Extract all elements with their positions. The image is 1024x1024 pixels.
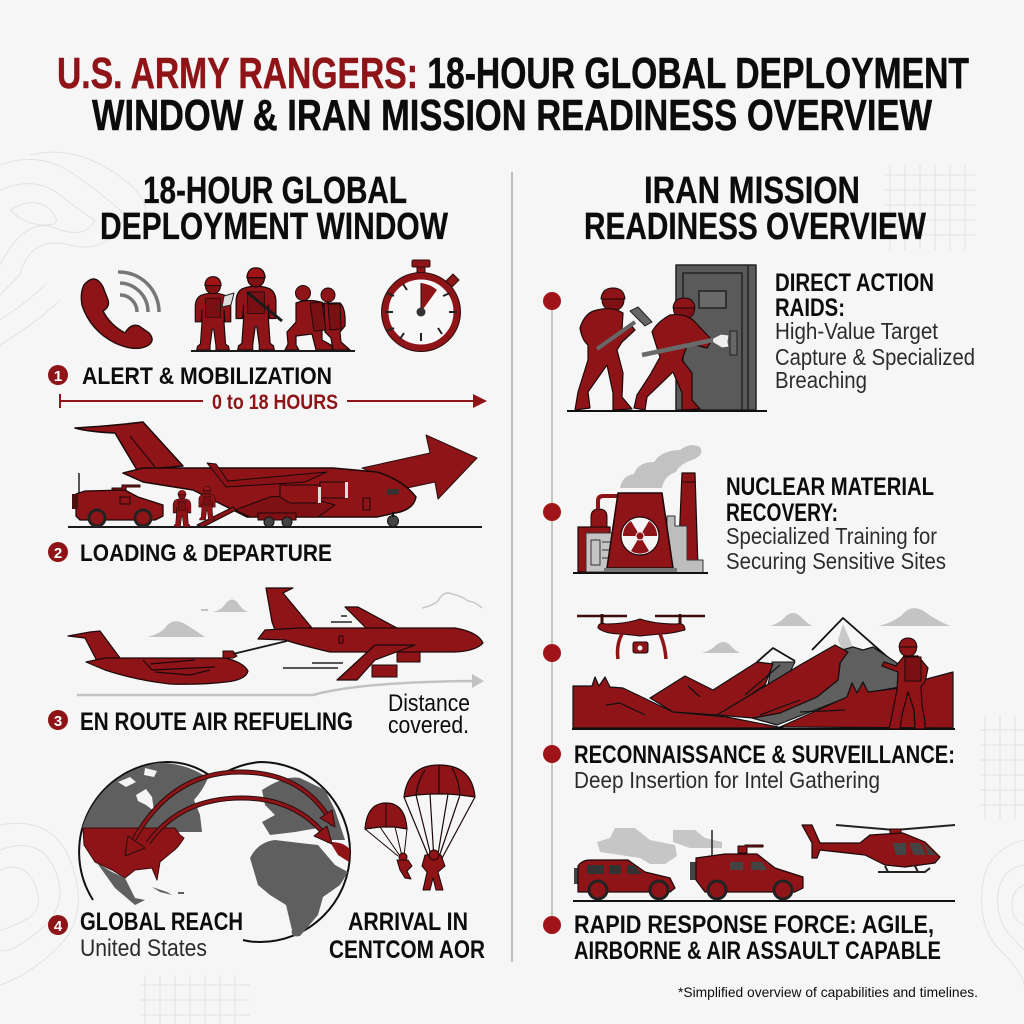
text: distance covered: [388, 690, 470, 739]
heading: iran mission: IRAN MISSION: [644, 170, 860, 212]
text: arrival in centcom aor: ARRIVAL IN: [348, 908, 468, 936]
illustration: transport aircraft loading: [68, 422, 482, 527]
text: reconnaissance and surveillance: Deep Insertion for Intel Gathering: [574, 767, 880, 793]
text: nuclear material recovery: RECOVERY:: [726, 499, 838, 527]
text: direct action raids: RAIDS:: [775, 294, 845, 322]
icon: armoured truck: [690, 830, 803, 899]
timeline arrow: 0 to 18 hours: 0 to 18 HOURS: [212, 391, 338, 414]
timeline arrow: 0 to 18 hours: [60, 391, 487, 414]
text: reconnaissance and surveillance: [574, 741, 955, 793]
icon: stopwatch: [382, 260, 460, 352]
step 2: loading and departure: LOADING & DEPARTURE: [80, 540, 332, 567]
text: nuclear material recovery: Securing Sensitive Sites: [726, 548, 946, 574]
illustration: nuclear site: [573, 445, 708, 573]
step 1: alert and mobilization: ALERT & MOBILIZATION: [82, 363, 332, 390]
text: rapid response force: RAPID RESPONSE FORCE: AGILE,: [574, 911, 934, 939]
text: distance covered: Distance: [388, 690, 470, 717]
title: [57, 49, 969, 140]
text: nuclear material recovery: [726, 473, 946, 574]
text: rapid response force: [574, 911, 941, 965]
text: arrival in centcom aor: [329, 908, 485, 964]
icon: soldier observing: [882, 638, 928, 729]
text: direct action raids: Breaching: [775, 367, 867, 393]
heading: deployment window: 18-HOUR GLOBAL: [143, 170, 407, 212]
heading: iran mission: [584, 170, 926, 248]
divider: [511, 172, 513, 962]
icon: helicopter: [802, 825, 955, 872]
text: direct action raids: [775, 269, 975, 393]
text: rapid response force: AIRBORNE & AIR ASSAULT CAPABLE: [574, 937, 941, 965]
illustration: refuelling receiver aircraft: [68, 631, 287, 684]
step 4: global reach: GLOBAL REACH: [80, 908, 243, 936]
illustration: clouds: [147, 593, 482, 637]
icon: soldiers: [191, 268, 355, 351]
icon: phone: [81, 272, 159, 348]
icon: soldiers boarding: [173, 486, 215, 527]
illustration: mountains: [572, 618, 955, 729]
text: direct action raids: Capture & Specialized: [775, 344, 975, 370]
step 3: en route refuelling: EN ROUTE AIR REFUELING: [80, 708, 353, 736]
text: nuclear material recovery: Specialized Training for: [726, 523, 937, 549]
step 4: global reach: [48, 908, 243, 962]
heading: deployment window: [100, 170, 448, 248]
footnote: *Simplified overview of capabilities and timelines.: [678, 984, 978, 1000]
illustration: clouds right: [702, 608, 950, 653]
arrow: distance covered: [77, 674, 484, 695]
icon: suv: [574, 860, 675, 899]
icon: parachutists: [365, 765, 475, 890]
text: distance covered: covered.: [388, 712, 469, 739]
text: nuclear material recovery: NUCLEAR MATERIAL: [726, 473, 934, 501]
icon: armoured vehicle: [72, 473, 163, 526]
timeline: readiness: [543, 292, 561, 934]
text: arrival in centcom aor: CENTCOM AOR: [329, 936, 485, 964]
heading: iran mission: READINESS OVERVIEW: [584, 206, 926, 248]
ground line: [573, 900, 955, 902]
step 3: en route refuelling: 3: [54, 713, 62, 730]
step 4: global reach: 4: [54, 918, 63, 935]
illustration: faded vehicles: [597, 828, 722, 864]
step 4: global reach: United States: [80, 935, 207, 962]
illustration: globe with routes: [79, 762, 350, 942]
icon: rangers with tools: [575, 288, 713, 410]
text: direct action raids: High-Value Target: [775, 318, 939, 344]
step 1: alert and mobilization: 1: [54, 368, 62, 385]
text: direct action raids: DIRECT ACTION: [775, 269, 934, 297]
illustration: breaching door: [567, 265, 767, 411]
step 2: loading and departure: 2: [54, 545, 62, 562]
heading: deployment window: DEPLOYMENT WINDOW: [100, 206, 448, 248]
icon: drone: [577, 614, 705, 659]
illustration: tanker aircraft: [258, 588, 483, 680]
